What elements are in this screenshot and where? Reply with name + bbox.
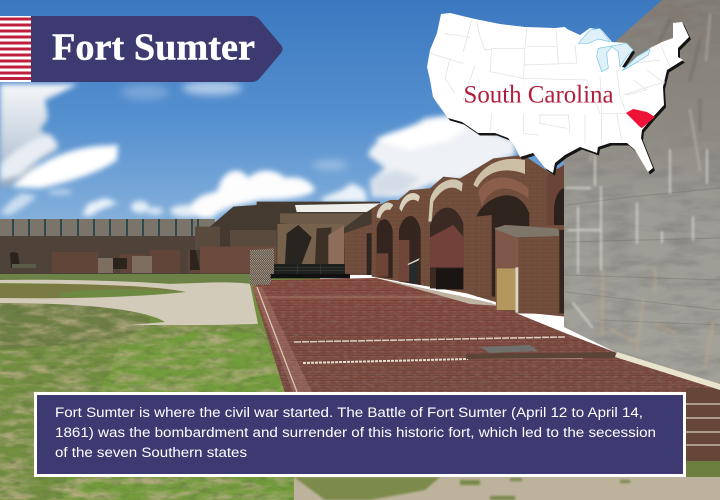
description text: of the seven Southern states xyxy=(55,445,247,461)
brick pillar xyxy=(250,248,274,285)
bottom sand strip xyxy=(294,477,720,500)
title banner xyxy=(0,16,282,82)
banner arrow shape xyxy=(31,16,282,82)
clouds xyxy=(0,81,515,218)
map label: South Carolina: South Carolina xyxy=(464,82,614,108)
concrete wall xyxy=(560,0,720,390)
great lakes xyxy=(578,28,650,72)
map land xyxy=(427,13,689,173)
back ramparts xyxy=(0,219,260,274)
flag stripes xyxy=(0,16,31,82)
heading: Fort Sumter xyxy=(52,26,255,68)
brick pier xyxy=(495,225,564,314)
arched brick wall xyxy=(372,155,565,317)
sky xyxy=(0,0,720,240)
description panel xyxy=(36,394,684,476)
description text: Fort Sumter is where the civil war started. The Battle of Fort Sumter (April 12 to April 14, xyxy=(55,405,643,421)
description text xyxy=(55,405,656,461)
interior casemates xyxy=(195,202,380,285)
arch openings xyxy=(377,219,393,278)
brick steps at right xyxy=(686,388,720,477)
ground: sand path xyxy=(0,280,258,325)
South Carolina highlighted xyxy=(626,109,655,128)
stone arch trims xyxy=(377,203,393,218)
upper lawn strips xyxy=(0,272,250,299)
ground: grass xyxy=(0,272,320,500)
state borders xyxy=(430,20,670,145)
map of the United States xyxy=(427,13,691,176)
black bench xyxy=(271,264,350,278)
map shadow xyxy=(429,16,691,176)
brick pavement xyxy=(252,278,714,392)
description text: 1861) was the bombardment and surrender of this historic fort, which led to the secession xyxy=(55,425,656,441)
